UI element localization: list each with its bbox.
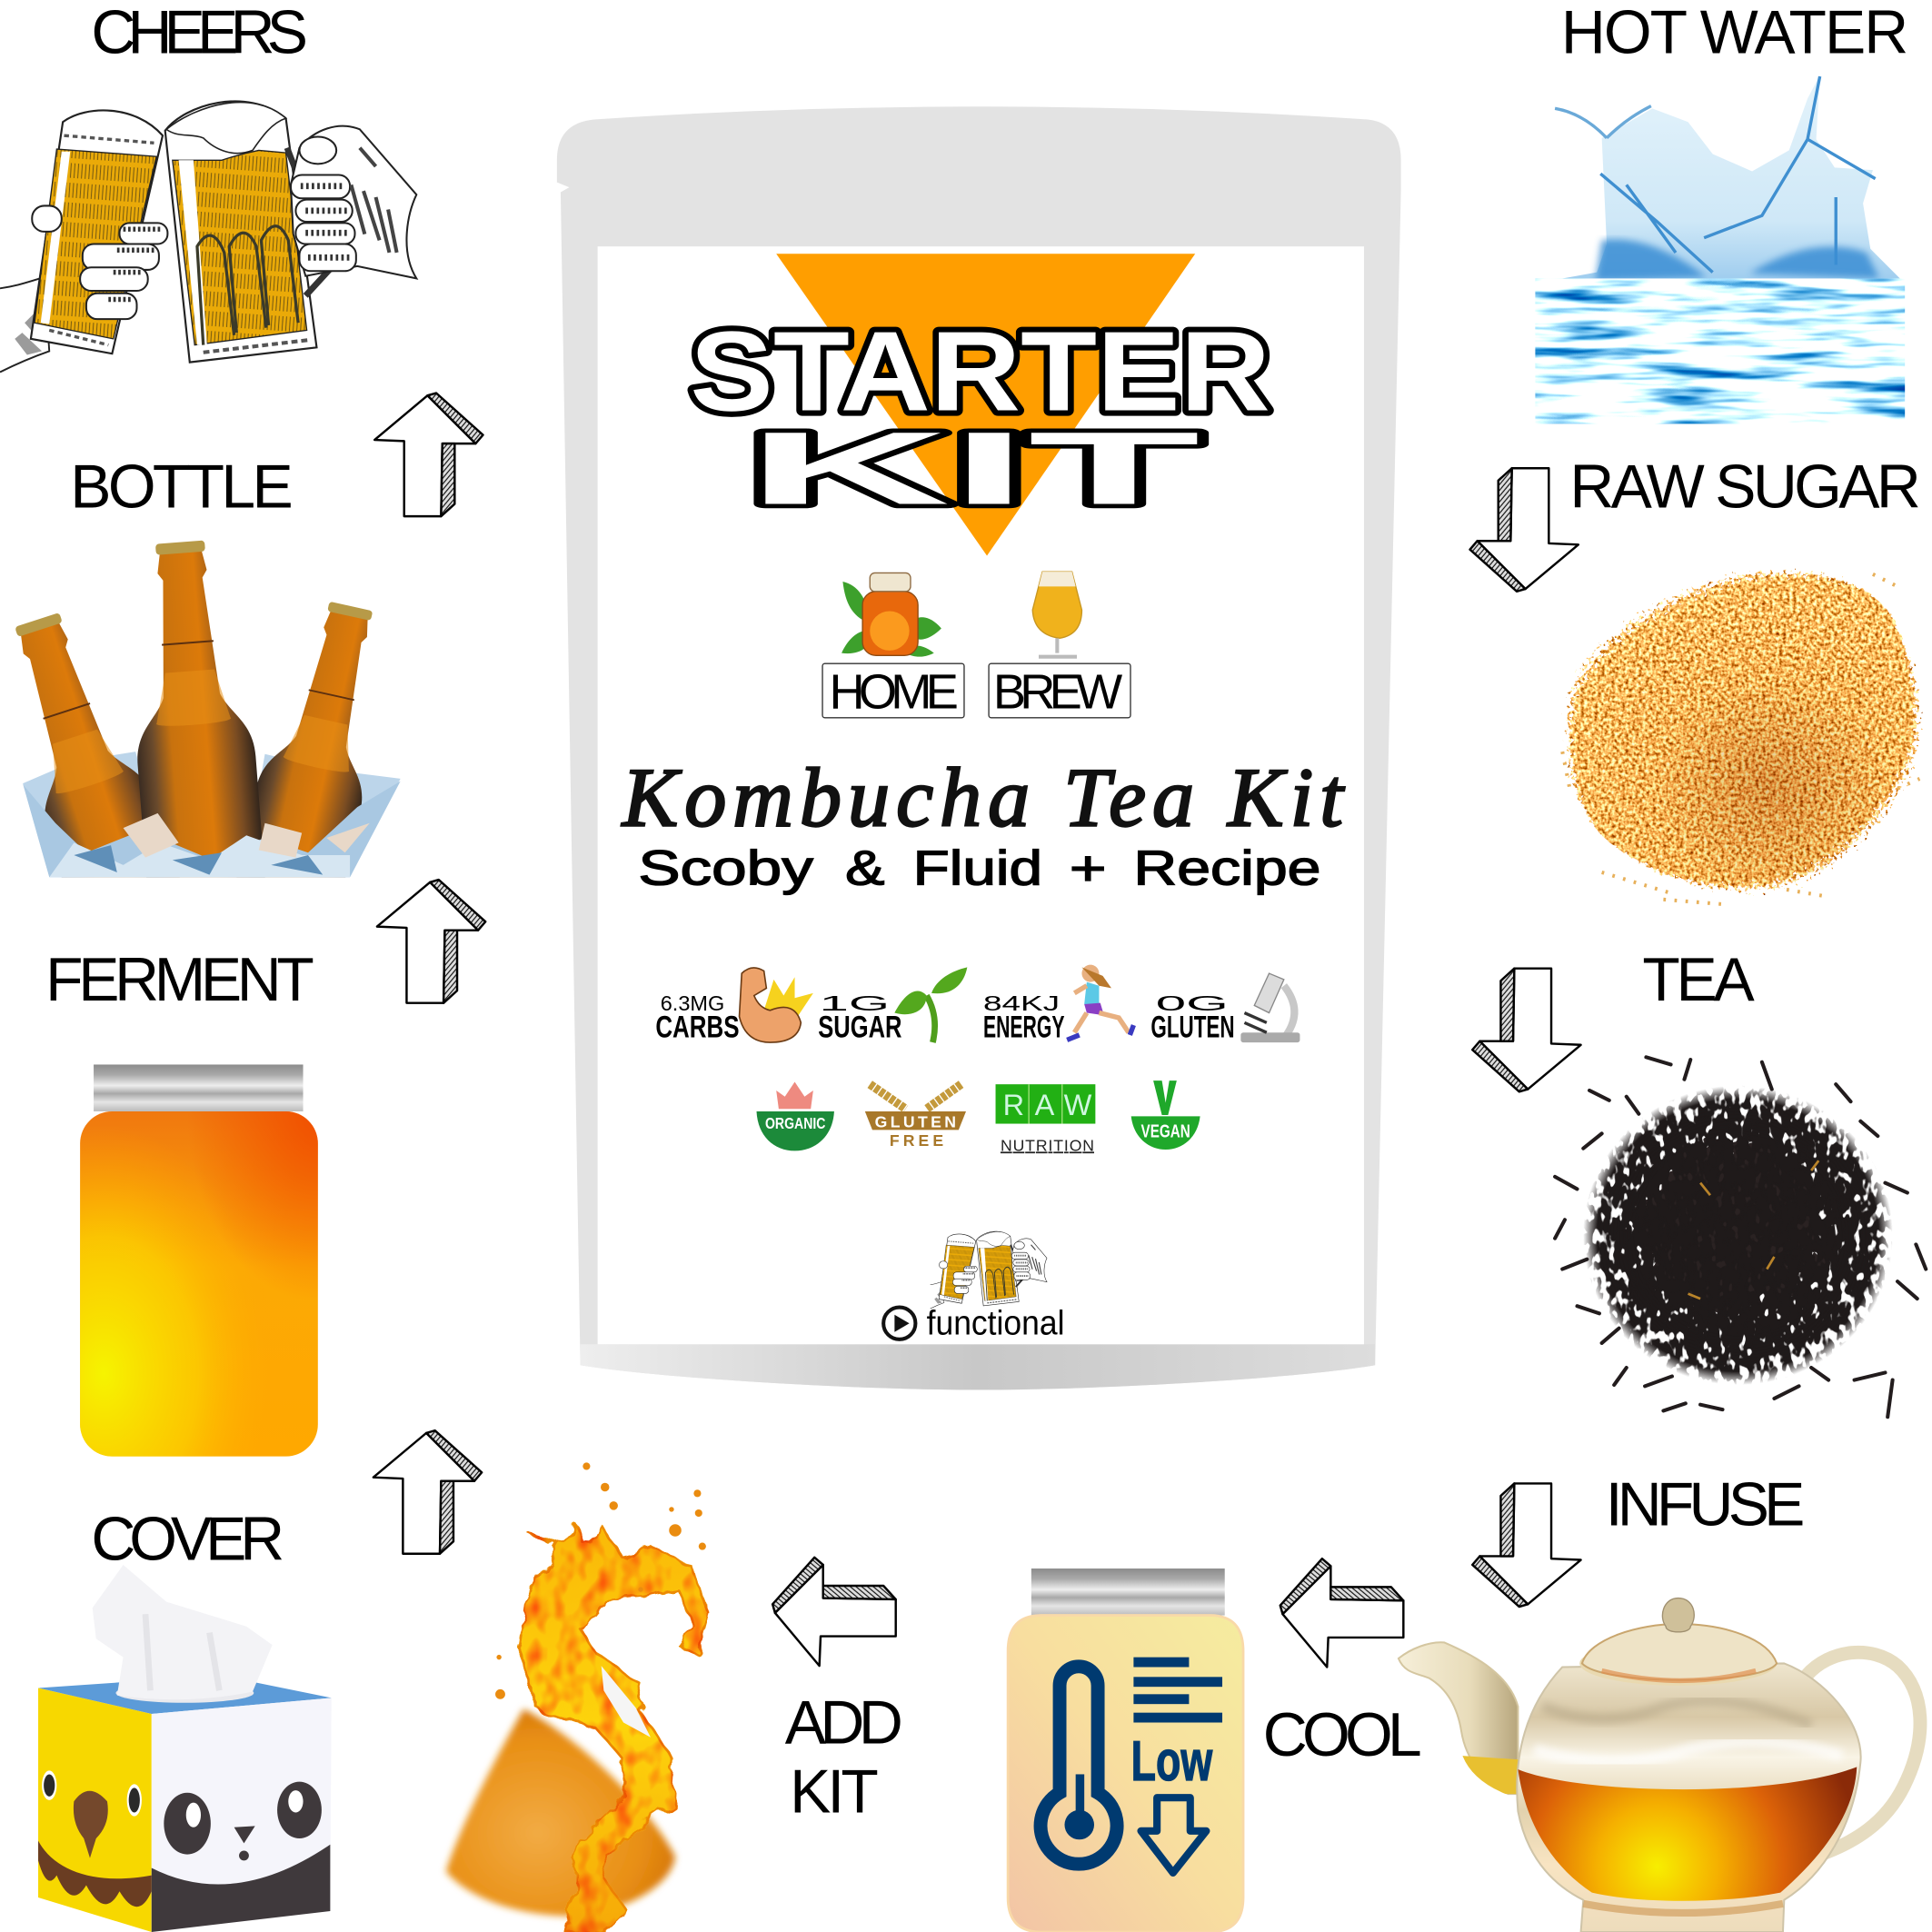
pouch bottom seal <box>581 1344 1375 1389</box>
label: INFUSE: INFUSE <box>1606 1471 1805 1539</box>
badge: organic: ORGANIC <box>765 1114 826 1132</box>
illustration: cool jar with low temperature thermometer <box>1008 1569 1243 1932</box>
label: CHEERS: CHEERS <box>91 0 308 66</box>
badge: raw nutrition: NUTRITION <box>1001 1136 1094 1154</box>
logo: small mugs <box>931 1231 1047 1309</box>
arrow up: ferment to bottle <box>377 880 485 1003</box>
badge: vegan: VEGAN <box>1141 1121 1190 1141</box>
illustration: water splash <box>1535 75 1905 423</box>
icon: runner <box>1067 965 1133 1040</box>
subheading: Scoby & Fluid + Recipe: Recipe <box>1133 842 1320 896</box>
stat: energy: 84KJ <box>983 991 1060 1015</box>
stat: gluten: 0G <box>1156 991 1229 1015</box>
label panel <box>598 246 1364 1344</box>
badge: BREW: BREW <box>993 665 1122 720</box>
badge: gluten free <box>865 1084 966 1150</box>
label: ADD KIT: KIT <box>790 1758 879 1826</box>
badge: gluten free: GLUTEN <box>875 1113 959 1131</box>
label: ADD KIT: ADD <box>785 1689 903 1758</box>
subheading: Scoby & Fluid + Recipe <box>638 842 1320 896</box>
stat: gluten <box>1150 973 1300 1045</box>
logo: functional: functional <box>927 1304 1064 1342</box>
badge: raw nutrition <box>996 1084 1095 1154</box>
illustration: bottles in ice <box>15 540 400 878</box>
stat: gluten: GLUTEN <box>1150 1011 1235 1045</box>
label: COVER: COVER <box>91 1506 284 1574</box>
illustration: raw sugar pile <box>1562 573 1919 904</box>
badge: raw nutrition: RAW <box>1003 1089 1092 1121</box>
illustration: clinking beer mugs <box>0 101 416 372</box>
stat: sugar: SUGAR <box>818 1011 901 1045</box>
subheading: Scoby & Fluid + Recipe: + <box>1070 842 1107 896</box>
subheading: Scoby & Fluid + Recipe: & <box>845 842 885 896</box>
label: BOTTLE: BOTTLE <box>70 453 294 522</box>
icon: microscope <box>1240 973 1300 1042</box>
label: COOL: COOL <box>1263 1701 1422 1769</box>
label: TEA: TEA <box>1642 946 1756 1014</box>
subheading: Scoby & Fluid + Recipe: Fluid <box>913 842 1042 896</box>
arrow up: cover to ferment <box>373 1430 482 1554</box>
title: KIT: KIT <box>747 412 1200 527</box>
illustration: fermenting jar <box>80 1064 318 1457</box>
pouch packaging <box>557 106 1401 1389</box>
icon: beer glass <box>1032 572 1081 657</box>
badge: gluten free: FREE <box>890 1131 947 1150</box>
badge: organic <box>757 1081 834 1150</box>
stat: sugar: 1G <box>820 991 890 1015</box>
label: RAW SUGAR: RAW SUGAR <box>1569 453 1921 522</box>
subheading: Scoby & Fluid + Recipe: Scoby <box>638 842 813 896</box>
arrow left: cool <box>1280 1559 1403 1667</box>
arrow down: infuse <box>1472 1483 1581 1607</box>
stat: energy <box>983 965 1133 1045</box>
title: STARTER: STARTER <box>690 309 1270 435</box>
icon: green sprout <box>894 967 967 1042</box>
arrow down: tea <box>1472 969 1581 1091</box>
illustration: glass teapot <box>1399 1598 1920 1932</box>
stat: energy: ENERGY <box>983 1011 1065 1045</box>
illustration: cool jar with low temperature thermometer: Low <box>1131 1730 1213 1793</box>
stat: carbs: 6.3MG <box>661 991 724 1015</box>
stat: carbs <box>655 968 813 1045</box>
arrow down: raw sugar <box>1470 468 1578 592</box>
label: ADD KIT <box>785 1689 903 1826</box>
pouch body <box>557 106 1401 1389</box>
arrow up: bottle to cheers <box>374 393 483 516</box>
icon: kombucha jar with leaves <box>842 573 941 657</box>
label: HOT WATER: HOT WATER <box>1561 0 1908 66</box>
stat: sugar <box>818 967 967 1045</box>
arrow left: add kit <box>772 1558 896 1666</box>
icon: flexed arm with sun <box>740 968 813 1042</box>
badge: HOME: HOME <box>829 665 959 720</box>
heading: Kombucha Tea Kit: Kombucha Tea Kit <box>621 751 1345 843</box>
orange triangle <box>776 254 1195 555</box>
label: FERMENT: FERMENT <box>45 946 314 1014</box>
badge: vegan <box>1131 1081 1200 1150</box>
illustration: loose black tea leaves <box>1550 1053 1926 1417</box>
stat: carbs: CARBS <box>655 1011 740 1045</box>
illustration: kombucha scoby with amber splash <box>446 1462 710 1932</box>
illustration: tissue box with animal faces <box>38 1565 332 1932</box>
